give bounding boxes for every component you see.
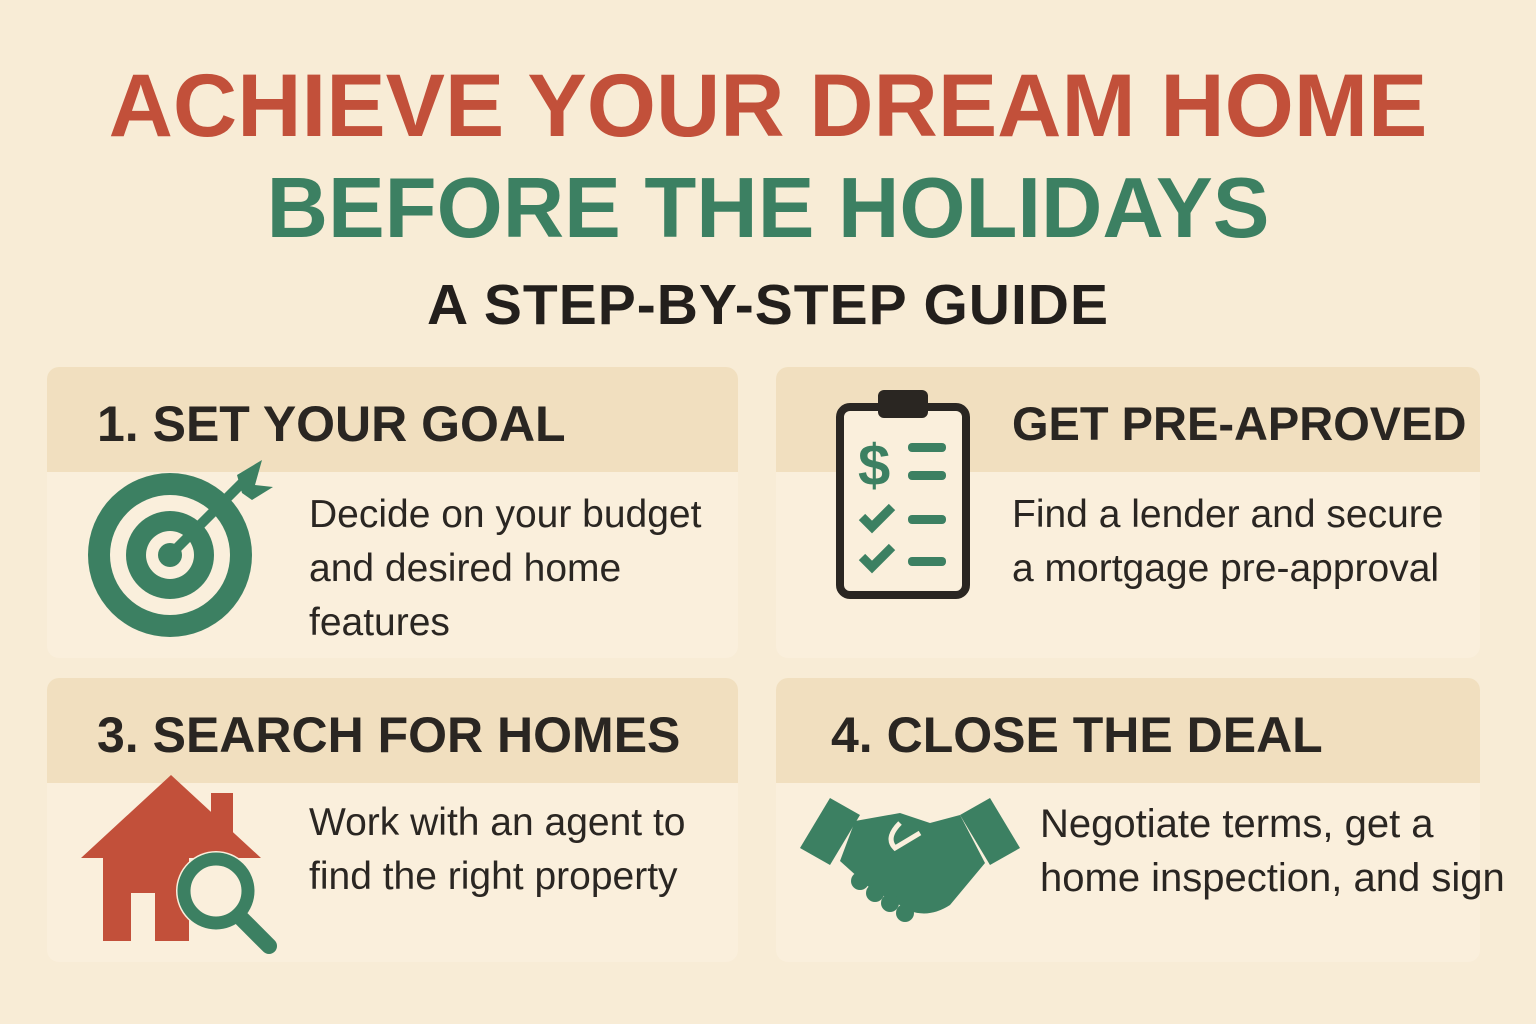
icon: clipboard	[836, 390, 970, 599]
panel: step 2	[776, 367, 1480, 658]
heading: step 3: 3. SEARCH FOR HOMES	[97, 707, 680, 763]
heading: step 2: GET PRE-APROVED	[1012, 397, 1466, 450]
icon: target	[88, 460, 273, 637]
text: step 1: features	[309, 601, 450, 644]
subtitle: A STEP-BY-STEP GUIDE	[427, 273, 1109, 337]
icon: house with magnifier	[81, 775, 277, 954]
heading: step 4: 4. CLOSE THE DEAL	[831, 707, 1323, 763]
title line 1: ACHIEVE YOUR DREAM HOME	[109, 55, 1427, 155]
text: step 1: Decide on your budget	[309, 493, 701, 536]
panel: step 3	[47, 678, 738, 962]
text: step 4: Negotiate terms, get a	[1040, 802, 1434, 846]
text: step 3	[309, 801, 685, 898]
text: step 1: and desired home	[309, 547, 621, 590]
text: step 4: home inspection, and sign	[1040, 856, 1505, 900]
text: step 2	[1012, 493, 1443, 590]
title line 2: BEFORE THE HOLIDAYS	[267, 161, 1269, 256]
text: step 2: a mortgage pre-approval	[1012, 547, 1439, 590]
panel: step 1	[47, 367, 738, 658]
text: step 2: Find a lender and secure	[1012, 493, 1443, 536]
heading: step 1: 1. SET YOUR GOAL	[97, 396, 566, 452]
panel: step 4	[776, 678, 1480, 962]
text: step 4	[1040, 802, 1505, 900]
icon: clipboard: $	[858, 433, 890, 498]
text: step 3: find the right property	[309, 855, 678, 898]
text: step 3: Work with an agent to	[309, 801, 685, 844]
text: step 1	[309, 493, 702, 644]
icon: handshake	[800, 798, 1020, 922]
